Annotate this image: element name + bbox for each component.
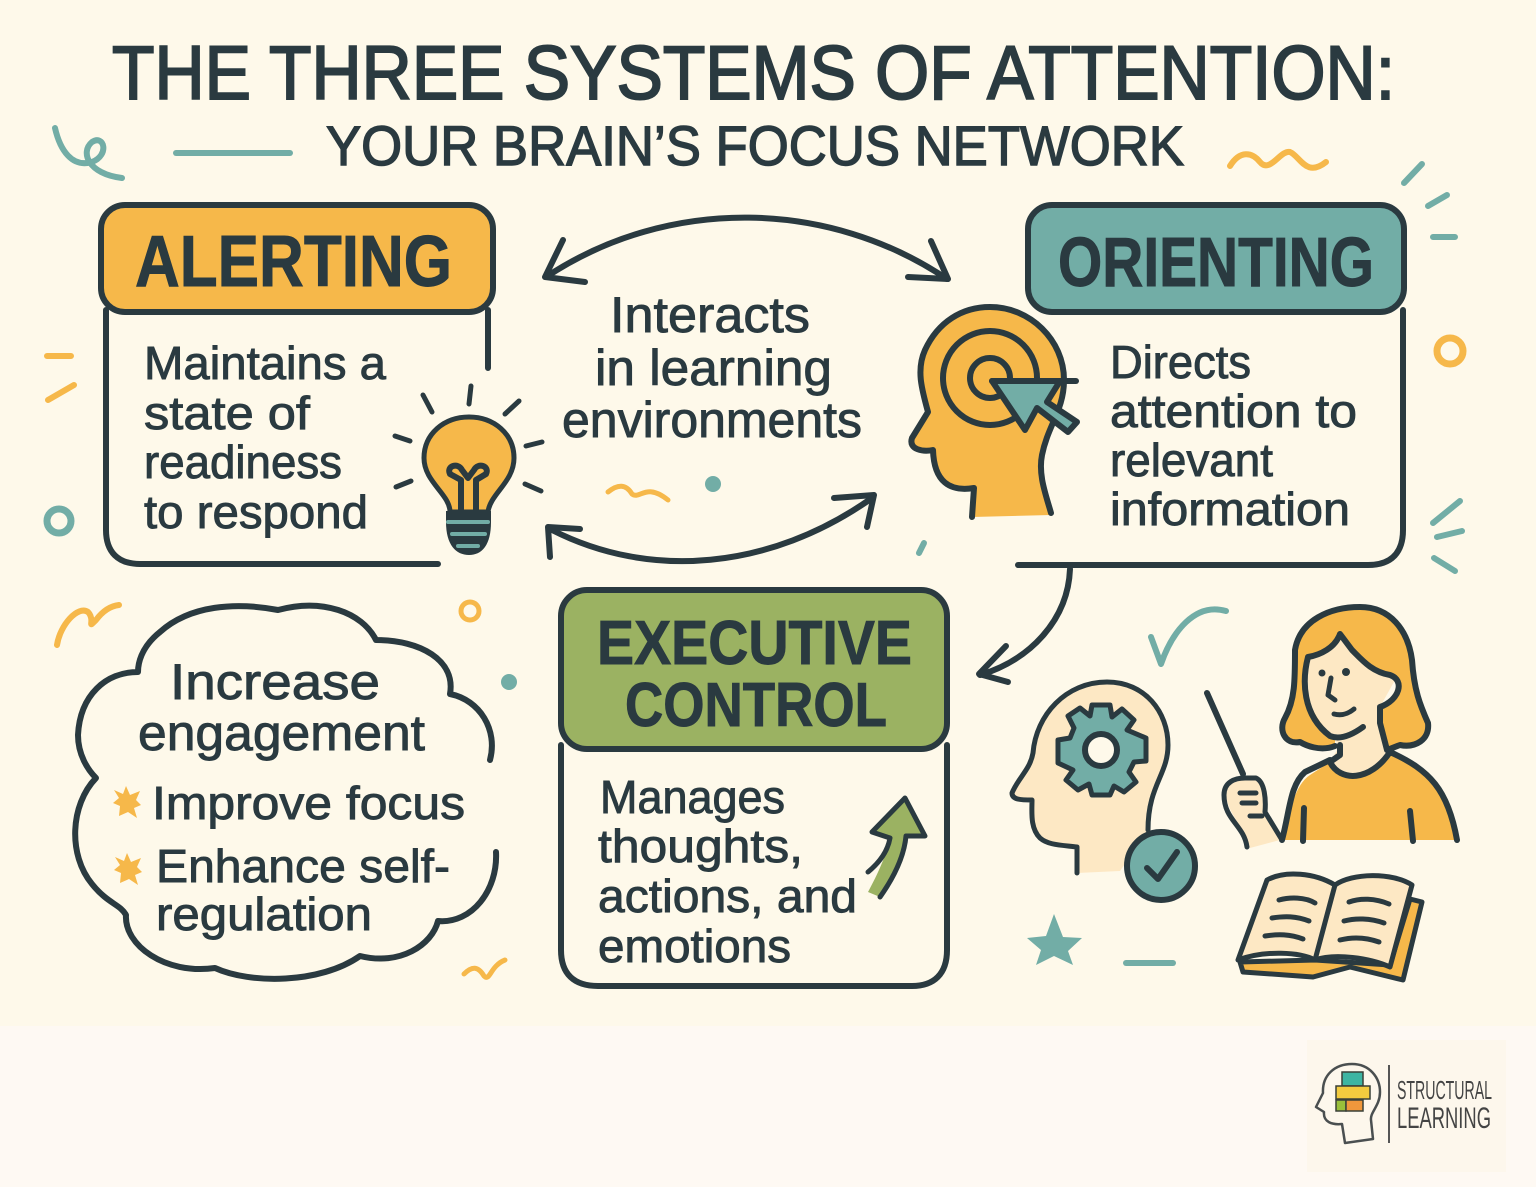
logo blocks (1336, 1072, 1370, 1111)
executive heading text (597, 609, 912, 740)
logo divider (1388, 1065, 1390, 1143)
cloud heading: Increase (170, 654, 380, 710)
arrow: orienting to executive control (979, 569, 1070, 682)
center interaction label: Interacts (610, 287, 810, 343)
cloud list: improve focus: Improve focus (152, 777, 465, 829)
executive body box (561, 745, 947, 986)
executive description: actions, and (598, 870, 857, 922)
icon: light bulb (395, 386, 542, 555)
executive header (561, 590, 947, 749)
alerting heading text: ALERTING (135, 222, 452, 302)
executive heading text: EXECUTIVE (597, 609, 912, 678)
decorative doodles (47, 128, 1463, 977)
executive description (598, 771, 857, 972)
executive description: emotions (598, 920, 791, 972)
neck and face (1305, 635, 1395, 773)
hand (1225, 777, 1280, 848)
alerting body box (106, 310, 488, 564)
orienting description: attention to (1110, 385, 1357, 437)
panel: alerting (101, 205, 542, 564)
orienting description: information (1110, 483, 1350, 535)
logo head (1316, 1064, 1380, 1143)
alerting description: readiness (144, 436, 342, 488)
alerting description: Maintains a (144, 337, 386, 389)
arrow: bottom arc between orienting and alerting (548, 495, 874, 561)
icon: head with target and cursor (911, 307, 1077, 517)
cloud list: enhance self-regulation: Enhance self- (156, 840, 450, 892)
orienting header (1028, 205, 1404, 312)
executive description: thoughts, (598, 820, 803, 872)
title: THE THREE SYSTEMS OF ATTENTION: (112, 31, 1395, 116)
cloud heading: engagement (138, 705, 425, 761)
logo panel (1307, 1040, 1506, 1172)
alerting description: state of (144, 387, 310, 439)
icon: open book (1238, 874, 1422, 980)
executive heading text: CONTROL (625, 671, 887, 740)
center interaction label: in learning (595, 340, 832, 396)
alerting description: to respond (144, 486, 368, 538)
center interaction label (562, 287, 862, 448)
icon: head with gear and check (1012, 682, 1195, 900)
alerting description (144, 337, 386, 538)
center interaction label: environments (562, 392, 862, 448)
cloud callout (75, 606, 496, 979)
cloud outline (75, 606, 496, 979)
icon: upward arrow (868, 798, 925, 897)
cloud list: enhance self-regulation (114, 840, 450, 940)
cloud heading (138, 654, 425, 761)
check badge (1127, 832, 1195, 900)
hair (1282, 607, 1428, 750)
panel: orienting (911, 205, 1404, 565)
orienting description: Directs (1110, 336, 1251, 388)
panel: executive control (561, 590, 947, 986)
arrow: top arc between alerting and orienting (545, 218, 948, 282)
orienting body box (1018, 310, 1403, 565)
cloud list: enhance self-regulation: regulation (156, 888, 372, 940)
pointer (1207, 693, 1243, 774)
gear (1058, 705, 1146, 795)
subtitle: YOUR BRAIN’S FOCUS NETWORK (326, 114, 1184, 177)
orienting description (1110, 336, 1357, 535)
orienting description: relevant (1110, 434, 1273, 486)
orienting heading text: ORIENTING (1058, 223, 1374, 301)
executive description: Manages (600, 771, 785, 823)
logo text (1397, 1075, 1492, 1135)
alerting header (101, 205, 493, 312)
icon: teacher with pointer (1207, 607, 1457, 848)
shirt (1282, 752, 1457, 840)
